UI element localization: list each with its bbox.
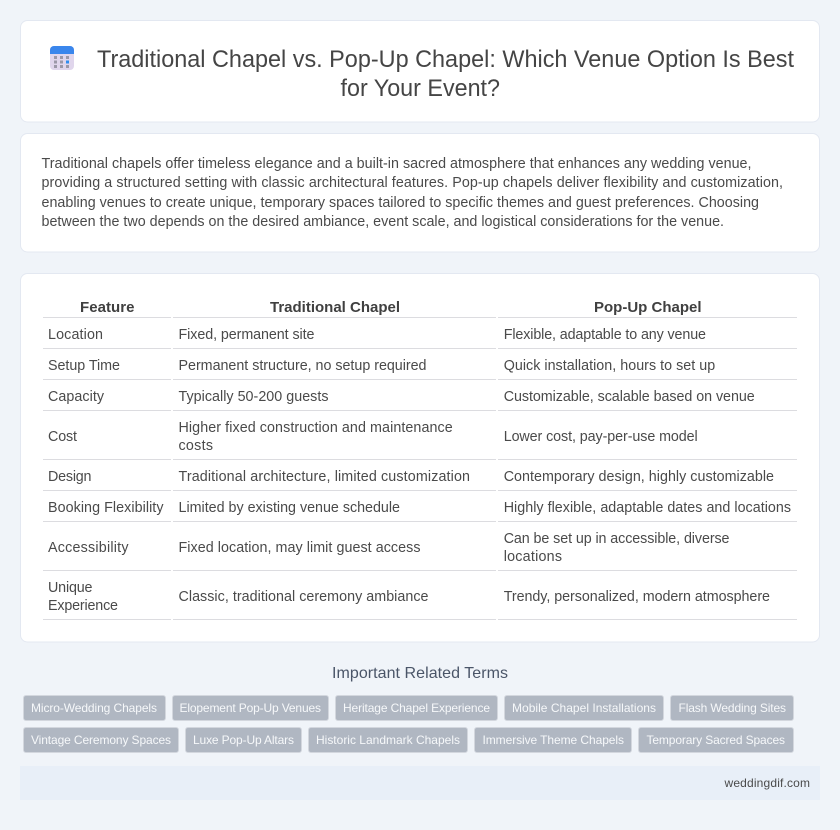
row: unique experience: Experience	[48, 598, 118, 614]
row: capacity	[48, 389, 755, 405]
tag: Historic Landmark Chapels	[316, 733, 460, 747]
icon: calendar	[50, 46, 74, 70]
tag	[308, 728, 468, 752]
tag: Temporary Sacred Spaces	[646, 733, 785, 747]
table header: Feature	[80, 299, 134, 316]
row: location: Flexible, adaptable to any venue	[504, 327, 706, 343]
row: capacity: Capacity	[48, 389, 105, 405]
row: booking flexibility	[48, 500, 791, 516]
row: booking flexibility: Booking Flexibility	[48, 500, 164, 516]
text block: introduction: between the two depends on the desired ambiance, event scale, and logistical considerations for the venue.	[42, 214, 724, 230]
tag: Luxe Pop-Up Altars	[193, 733, 294, 747]
row: capacity: Customizable, scalable based on venue	[504, 389, 755, 405]
footer	[20, 766, 820, 800]
tag	[186, 728, 302, 752]
tag	[474, 728, 632, 752]
row: accessibility: Fixed location, may limit guest access	[178, 540, 420, 556]
text block: introduction: providing a structured setting with classic architectural features. Pop-up chapels deliver flexibility and customization,	[42, 175, 783, 191]
row: unique experience: Trendy, personalized, modern atmosphere	[504, 589, 770, 605]
tag: Immersive Theme Chapels	[482, 733, 624, 747]
tag	[24, 728, 178, 752]
tags: related terms	[24, 696, 794, 752]
text block: introduction	[42, 156, 783, 230]
tag	[172, 696, 328, 720]
table header: Traditional Chapel	[270, 299, 400, 316]
heading: related terms: Important Related Terms	[332, 665, 508, 682]
tag: Micro-Wedding Chapels	[31, 701, 157, 715]
panel: header	[20, 20, 820, 122]
tag: Heritage Chapel Experience	[343, 701, 490, 715]
title: for Your Event?	[340, 75, 500, 102]
table header: Pop-Up Chapel	[594, 299, 702, 316]
row: accessibility	[48, 531, 730, 565]
tag	[336, 696, 498, 720]
title	[97, 46, 794, 102]
row: location: Location	[48, 327, 103, 343]
panel: introduction	[20, 134, 820, 252]
row: booking flexibility: Limited by existing venue schedule	[178, 500, 400, 516]
row: design: Contemporary design, highly customizable	[504, 469, 774, 485]
tag	[638, 728, 794, 752]
row: cost: Higher fixed construction and maintenance	[178, 420, 453, 436]
panel: comparison table	[20, 274, 820, 642]
tag: Mobile Chapel Installations	[512, 701, 656, 715]
row: design: Design	[48, 469, 92, 485]
row: cost	[48, 420, 698, 454]
row: unique experience	[48, 580, 770, 614]
row: design	[48, 469, 774, 485]
text block: introduction: enabling venues to create unique, temporary spaces tailored to specific themes and guest preferences. Choosing	[42, 195, 759, 211]
row: setup time: Setup Time	[48, 358, 120, 374]
row: accessibility: locations	[504, 549, 562, 565]
row: cost: Cost	[48, 429, 77, 445]
row: capacity: Typically 50-200 guests	[178, 389, 328, 405]
row: location	[48, 327, 706, 343]
row: setup time: Permanent structure, no setup required	[178, 358, 427, 374]
row: cost: costs	[178, 438, 213, 454]
title: Traditional Chapel vs. Pop-Up Chapel: Which Venue Option Is Best	[97, 46, 794, 73]
row: design: Traditional architecture, limited customization	[178, 469, 470, 485]
text block: introduction: Traditional chapels offer timeless elegance and a built-in sacred atmosphere that enhances any wedding venue,	[42, 156, 752, 172]
footer: weddingdif.com	[724, 776, 810, 790]
row: cost: Lower cost, pay-per-use model	[504, 429, 698, 445]
tag	[24, 696, 166, 720]
tag	[670, 696, 794, 720]
row: accessibility: Can be set up in accessible, diverse	[504, 531, 730, 547]
tag: Flash Wedding Sites	[678, 701, 786, 715]
tag	[504, 696, 664, 720]
row: booking flexibility: Highly flexible, adaptable dates and locations	[504, 500, 791, 516]
tag: Vintage Ceremony Spaces	[31, 733, 171, 747]
row: setup time	[48, 358, 715, 374]
table header	[80, 299, 702, 316]
row: unique experience: Classic, traditional ceremony ambiance	[178, 589, 429, 605]
tag: Elopement Pop-Up Venues	[180, 701, 321, 715]
row: location: Fixed, permanent site	[178, 327, 315, 343]
row: accessibility: Accessibility	[48, 540, 129, 556]
row: setup time: Quick installation, hours to set up	[504, 358, 715, 374]
row: unique experience: Unique	[48, 580, 93, 596]
